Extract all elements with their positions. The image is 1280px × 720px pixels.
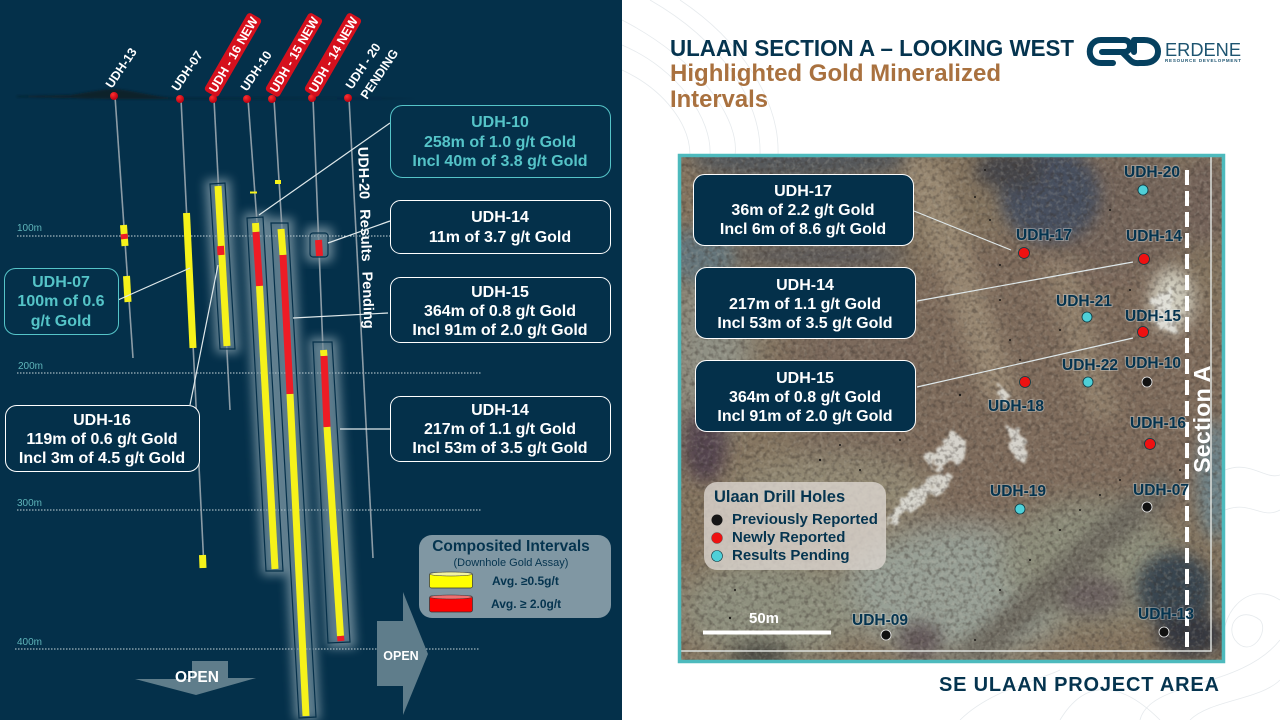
depth grid: 400m [17,637,42,648]
drill hole labels: UDH-18 [988,398,1044,415]
callout: map UDH-14 [696,268,916,338]
drill hole labels: UDH-15 [1125,308,1181,325]
new hole tags: UDH - 16 NEW [206,14,261,95]
callout: map UDH-15: 364m of 0.8 g/t Gold [729,389,881,406]
swatch: red [430,595,472,612]
callout: UDH-07: UDH-07 [32,274,90,291]
drill hole labels: UDH-13 [1138,606,1194,623]
arrow: open downward [135,661,256,695]
callout: UDH-15: Incl 91m of 2.0 g/t Gold [412,322,588,339]
legend: drill holes: Previously Reported [732,511,878,528]
map frame [680,156,1224,662]
title: ULAAN SECTION A – LOOKING WEST [670,35,1074,61]
callout: UDH-16 [6,406,200,472]
callout: UDH-10: Incl 40m of 3.8 g/t Gold [412,153,588,170]
drill hole labels: UDH-10 [1125,355,1181,372]
logo: Erdene: RESOURCE DEVELOPMENT [1165,58,1241,63]
callout: UDH-10: 258m of 1.0 g/t Gold [424,134,576,151]
callout: UDH-15 [390,278,610,342]
callout: map UDH-17: Incl 6m of 8.6 g/t Gold [720,221,886,238]
legend: composited intervals: (Downhole Gold Assay) [454,557,568,569]
gold intervals: UDH-14 [318,240,341,641]
drill hole labels: UDH-17 [1016,227,1072,244]
section line [1185,170,1189,652]
callout: UDH-07: 100m of 0.6 [17,293,105,310]
callout: UDH-14 short [390,200,610,254]
new hole tags [204,12,362,98]
title: Intervals [670,86,768,113]
title: Highlighted Gold Mineralized [670,60,1001,87]
callout: map UDH-14: UDH-14 [776,277,834,294]
legend: composited intervals: Composited Intervals [432,538,590,555]
drill hole labels: UDH-09 [852,612,908,629]
drill hole labels: UDH-07 [1133,482,1189,499]
arrow: open right [377,592,428,715]
surface topography [17,89,420,99]
drill hole labels [852,164,1194,629]
callout: map UDH-15: UDH-15 [776,370,834,387]
callout: UDH-14: Incl 53m of 3.5 g/t Gold [412,440,588,457]
callout: map UDH-14: 217m of 1.1 g/t Gold [729,296,881,313]
depth grid: 200m [18,361,43,372]
drill hole labels: UDH-14 [1126,228,1182,245]
drill hole labels: UDH-16 [1130,415,1186,432]
arrow: open downward: OPEN [175,669,219,686]
callout: map UDH-17: 36m of 2.2 g/t Gold [731,202,875,219]
legend: drill holes: Results Pending [732,547,850,564]
hole labels: PENDING [358,47,401,102]
hole labels: UDH - 20 [343,41,384,92]
footer label: SE ULAAN PROJECT AREA [939,674,1219,696]
callout: map UDH-15 [696,360,916,432]
callout: UDH-07 [4,268,118,334]
panel: drill section (dark background) [0,0,622,720]
logo: Erdene: ERDENE [1165,40,1241,60]
legend: composited intervals: Avg. ≥0.5g/t [492,574,559,588]
callout: UDH-10 [390,106,610,178]
legend: composited intervals [419,535,611,618]
depth grid: 300m [17,498,42,509]
callout: map UDH-15: Incl 91m of 2.0 g/t Gold [717,408,893,425]
new hole tags: UDH - 14 NEW [306,14,361,95]
callout: UDH-14 short: 11m of 3.7 g/t Gold [429,229,571,246]
callout: UDH-07: g/t Gold [31,313,91,330]
leader lines [118,123,391,429]
decorative contour lines [622,0,1280,720]
callout: UDH-16: Incl 3m of 4.5 g/t Gold [19,450,185,467]
callout: UDH-16: UDH-16 [73,412,131,429]
drill hole labels: UDH-19 [990,483,1046,500]
hole labels [103,41,401,102]
ground specks [729,169,1181,641]
callout: UDH-15: 364m of 0.8 g/t Gold [424,303,576,320]
leader lines [914,211,1133,387]
callout: UDH-16: 119m of 0.6 g/t Gold [26,431,178,448]
gold intervals: UDH-13 [124,225,128,302]
highlight halos around intervals [205,179,356,720]
legend: drill holes: Ulaan Drill Holes [714,488,845,506]
depth grid: 100m [17,223,42,234]
logo: Erdene [1090,40,1241,63]
vertical note: UDH-20 Results Pending [354,147,376,329]
hole labels: UDH-07 [169,48,206,94]
new hole tags: UDH - 15 NEW [267,14,322,95]
scale bar: 50m [749,610,779,627]
gold intervals: UDH-16 [218,186,227,346]
title [670,35,1074,113]
hole outlines [210,183,350,718]
callout: UDH-15: UDH-15 [471,284,529,301]
depth grid [15,223,482,649]
arrow: open right: OPEN [383,649,419,663]
hole labels: UDH-13 [103,45,140,91]
drill hole labels: UDH-21 [1056,293,1112,310]
callout: UDH-10: UDH-10 [471,114,529,131]
satellite imagery [665,140,1233,667]
legend: drill holes: Newly Reported [732,529,845,546]
hole labels: UDH-10 [238,48,275,94]
callout: UDH-14: UDH-14 [471,402,529,419]
drill traces [115,96,373,568]
callout: map UDH-14: Incl 53m of 3.5 g/t Gold [717,315,893,332]
callout: UDH-14 [390,396,610,462]
gold intervals: UDH-07 [186,213,203,568]
section label: Section A [1189,365,1215,473]
collars [110,92,352,103]
panel: satellite map [665,140,1233,667]
inner guide line [681,157,1211,651]
scale bar [703,610,831,634]
callout: UDH-14 short: UDH-14 [471,209,529,226]
gold intervals: UDH-10 [250,192,275,569]
legend: drill holes [704,482,886,570]
callout: map UDH-17: UDH-17 [774,183,832,200]
drill hole labels: UDH-22 [1062,357,1118,374]
legend: composited intervals: Avg. ≥ 2.0g/t [491,597,561,611]
callout: map UDH-17 [694,174,914,246]
gold intervals: UDH-15 [275,182,306,716]
callout: UDH-14: 217m of 1.1 g/t Gold [424,421,576,438]
swatch: yellow [430,572,472,588]
drill hole labels: UDH-20 [1124,164,1180,181]
drill hole markers [881,185,1169,640]
